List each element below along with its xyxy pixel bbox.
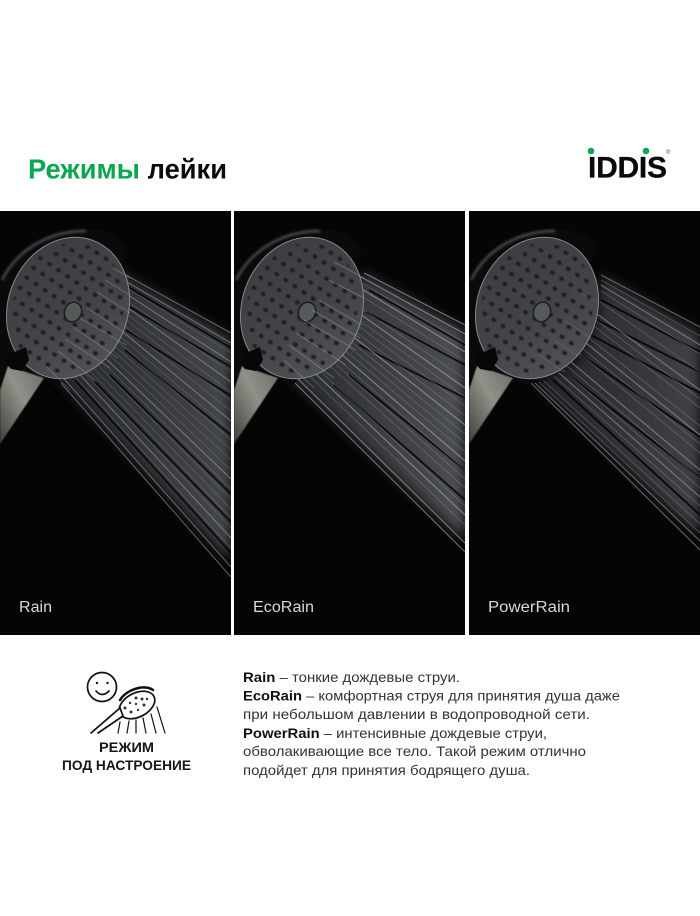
icon caption: РЕЖИМ bbox=[99, 740, 154, 755]
water spray: Rain bbox=[47, 268, 231, 577]
icon: shower head bbox=[91, 686, 165, 733]
panel: PowerRain bbox=[469, 211, 700, 635]
icon: smiley bbox=[88, 672, 116, 702]
description text bbox=[243, 669, 620, 778]
shower head: EcoRain bbox=[221, 220, 383, 444]
description text: EcoRain – комфортная струя для принятия душа даже bbox=[243, 688, 620, 704]
water on face: Rain bbox=[47, 268, 130, 390]
description text: PowerRain – интенсивные дождевые струи, bbox=[243, 725, 547, 741]
description text: обволакивающие все тело. Такой режим отлично bbox=[243, 743, 586, 759]
description text: Rain – тонкие дождевые струи. bbox=[243, 669, 460, 685]
label: Rain: Rain bbox=[19, 599, 52, 616]
label: PowerRain: PowerRain bbox=[488, 599, 570, 616]
logo: iDDIS: ® bbox=[666, 149, 671, 156]
water spray: PowerRain bbox=[531, 275, 700, 550]
panel: EcoRain bbox=[234, 211, 465, 635]
description text: при небольшом давлении в водопроводной сети. bbox=[243, 706, 590, 722]
icon caption bbox=[62, 740, 191, 773]
water spray: EcoRain bbox=[289, 273, 465, 552]
logo: iDDIS: IDDIS bbox=[588, 152, 667, 184]
label: EcoRain: EcoRain bbox=[253, 599, 314, 616]
panel: Rain bbox=[0, 211, 231, 635]
water on face: PowerRain bbox=[539, 290, 597, 372]
water on face: EcoRain bbox=[284, 262, 364, 388]
title: Режимы лейки bbox=[28, 154, 227, 184]
icon: smiley and shower head bbox=[88, 672, 165, 733]
icon caption: ПОД НАСТРОЕНИЕ bbox=[62, 758, 191, 773]
shower head: PowerRain bbox=[456, 220, 618, 444]
description text: подойдет для принятия бодрящего душа. bbox=[243, 762, 530, 778]
shower head: Rain bbox=[0, 220, 149, 444]
